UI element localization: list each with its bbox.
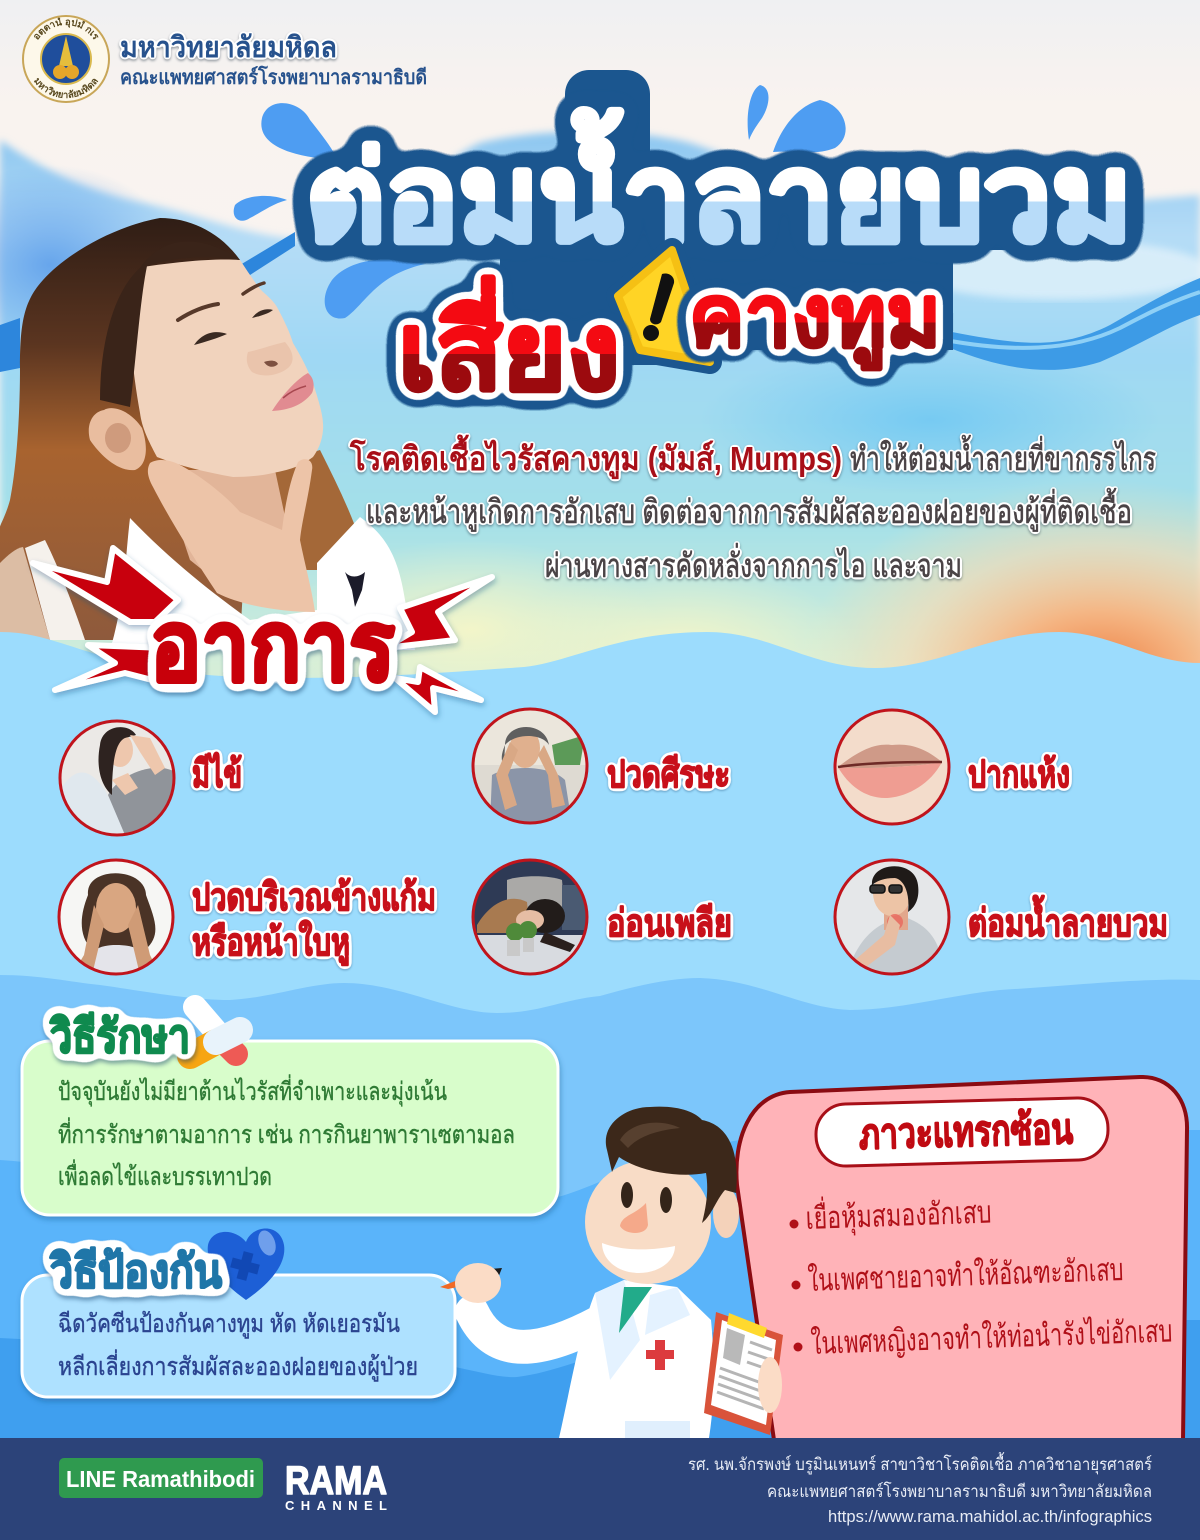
clipboard [704,1312,783,1435]
complication list: เยื่อหุ้มสมองอักเสบ [805,1191,992,1238]
prevention text [58,1310,418,1382]
symptoms heading with lightning bolts [33,548,492,712]
label: dry mouth: ปากแห้ง [968,754,1070,796]
footer bar [0,1438,1200,1540]
photo ring [60,721,174,835]
doctor arm [472,1312,600,1347]
prevention text: หลีกเลี่ยงการสัมผัสละอองฝอยของผู้ป่วย [58,1349,418,1382]
photo ring [59,860,173,974]
faculty name: คณะแพทยศาสตร์โรงพยาบาลรามาธิบดี [120,65,427,89]
icon: warning sign [618,250,710,362]
icon: university seal: อตฺตานํ อุปมํ กเร [34,18,99,40]
photo: dry lips [834,708,950,824]
treatment text: เพื่อลดไข้และบรรเทาปวด [58,1159,272,1191]
doctor hand and pen [440,1263,502,1303]
intro line 3: ผ่านทางสารคัดหลั่งจากการไอ และจาม [545,543,962,584]
symptom: fatigue [472,860,732,976]
heading: mumps: คางทูม [689,269,941,370]
intro line 1 emphasis: โรคติดเชื้อไวรัสคางทูม (มัมส์, Mumps) [349,434,842,480]
credits [688,1452,1152,1526]
photo: woman holding cheeks [58,860,174,976]
doctor coat [559,1280,714,1438]
prevention text: ฉีดวัคซีนป้องกันคางทูม หัด หัดเยอรมัน [58,1310,400,1339]
heading: treatment: วิธีรักษา [49,1010,190,1062]
panel background [736,1077,1187,1440]
photo: older woman with headache [472,708,588,824]
photo ring [473,709,587,823]
university name: มหาวิทยาลัยมหิดล [120,32,337,64]
photo ring [473,860,587,974]
heading: risk: เสี่ยง [398,276,620,412]
LINE badge [59,1458,263,1498]
symptom: dry mouth [834,708,1070,824]
Rama Channel logo: RAMA [285,1459,387,1503]
illustration: doctor with clipboard and pen [440,1107,783,1438]
LINE badge: LINE Ramathibodi [66,1466,255,1492]
heading: prevention: วิธีป้องกัน [49,1245,222,1297]
water splash drops [234,85,846,318]
treatment text: ปัจจุบันยังไม่มียาต้านไวรัสที่จำเพาะและมุ่งเน้น [58,1074,447,1107]
symptom: swollen gland [834,860,1168,976]
complications heading pill: ภาวะแทรกซ้อน [858,1105,1074,1158]
symptom: cheek pain [58,860,436,976]
label: headache: ปวดศีรษะ [607,754,730,796]
water ribbon right [950,278,1200,370]
symptom: headache [472,708,730,824]
label: cheek pain line 2: หรือหน้าใบหู [192,920,350,966]
complications heading pill [815,1097,1109,1167]
icon: university seal [22,15,110,103]
photo: man touching neck [834,860,950,976]
label: fatigue: อ่อนเพลีย [607,903,732,945]
label: cheek pain line 1: ปวดบริเวณข้างแก้ม [192,877,436,919]
photo: woman holding her swollen jaw [0,218,415,650]
icon: blue heart with cross [208,1228,284,1300]
photo: woman with fever [60,720,175,835]
treatment text: ที่การรักษาตามอาการ เช่น การกินยาพาราเซตามอล [58,1117,515,1149]
icon: capsules [190,1007,240,1056]
panel background [22,1275,455,1397]
navy tone mark backing [565,70,650,180]
photo ring [835,710,949,824]
background: sky and water [0,0,1200,860]
photo ring [835,860,949,974]
doctor head [585,1160,711,1284]
symptom: fever [60,720,242,835]
icon: university seal: มหาวิทยาลัยมหิดล [34,78,98,98]
navy backing block [310,165,1125,365]
panel: treatment [22,1007,558,1215]
panel: complications [736,1077,1187,1440]
main title [306,70,1132,412]
Rama Channel logo: CHANNEL [285,1498,387,1513]
photo: woman asleep at desk [472,860,588,976]
complication list [790,1191,1173,1361]
panel background [22,1041,558,1215]
label: fever: มีไข้ [192,752,242,796]
heading: swollen salivary gland: ต่อมน้ำลายบวม [306,109,1132,266]
logo and institution [22,15,427,103]
water ribbon left [0,318,20,372]
lower background waves [0,632,1200,1438]
credits: https://www.rama.mahidol.ac.th/infographics [828,1507,1152,1526]
treatment text [58,1074,515,1191]
panel: prevention [22,1228,455,1397]
intro paragraph [349,434,1156,584]
icon: lightning bolts [33,548,492,712]
credits: รศ. นพ.จักรพงษ์ บรูมินเหนทร์ สาขาวิชาโรคติดเชื้อ ภาควิชาอายุรศาสตร์ [688,1452,1152,1475]
credits: คณะแพทยศาสตร์โรงพยาบาลรามาธิบดี มหาวิทยาลัยมหิดล [767,1481,1152,1501]
heading: symptoms: อาการ [150,591,395,701]
